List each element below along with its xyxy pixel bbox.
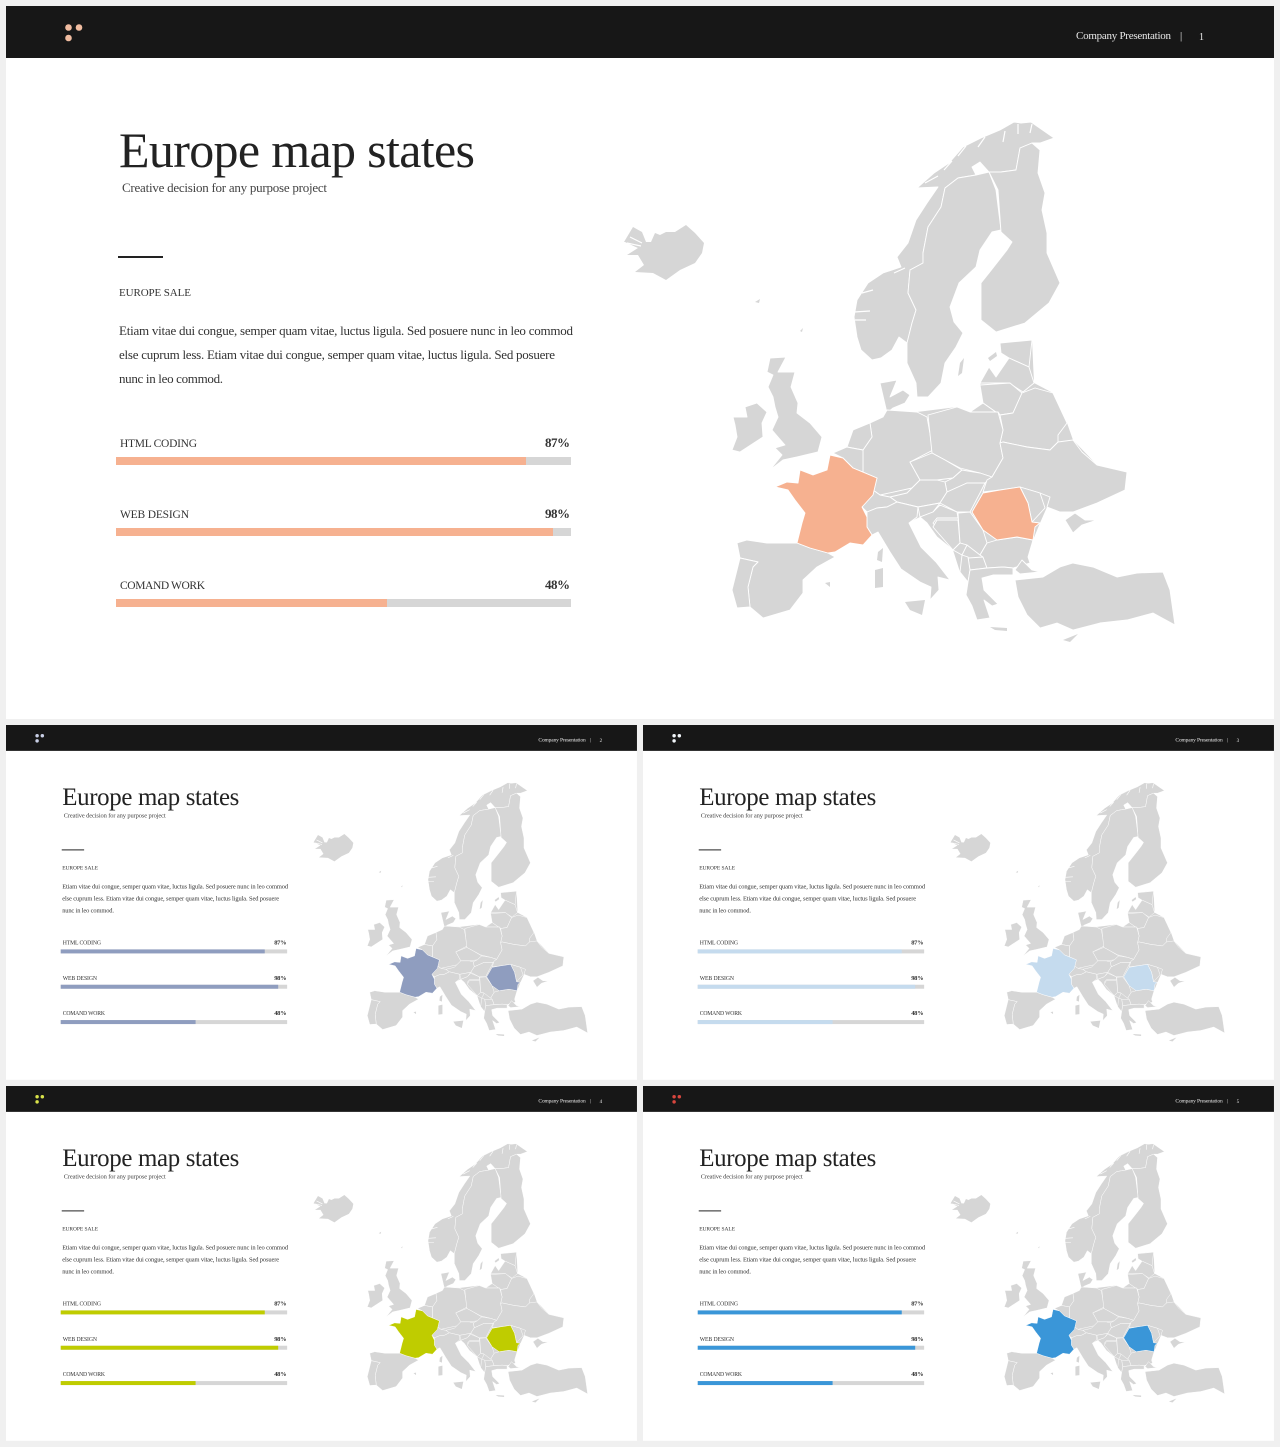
bar: comand work: [698, 1010, 924, 1024]
bar: web design: WEB DESIGN: [700, 976, 734, 982]
panel: slate slide: [6, 725, 637, 1080]
title: Europe map states: [699, 1145, 876, 1172]
bar: html coding: [116, 435, 571, 465]
bar: web design: WEB DESIGN: [63, 976, 97, 982]
bar: html coding: [698, 1300, 924, 1314]
header bar: [643, 1086, 1274, 1112]
body text: else cuprum less. Etiam vitae dui congue, semper quam vitae, luctus ligula. Sed posuere: [62, 1257, 279, 1264]
icon: logo dots: [672, 734, 681, 743]
bar: web design: [61, 1336, 287, 1350]
bar: html coding: 87%: [911, 939, 924, 946]
header divider: |: [1180, 30, 1182, 42]
bar: html coding: HTML CODING: [120, 438, 197, 450]
page number: 1: [1199, 32, 1204, 43]
body text: [699, 1245, 926, 1276]
map of Europe: [951, 783, 1225, 1041]
bar: web design: 98%: [274, 975, 287, 982]
bar: web design: [116, 506, 571, 536]
map of Europe: [624, 122, 1175, 642]
bar: web design: [698, 1336, 924, 1350]
page number: 3: [1237, 739, 1240, 744]
map of Europe: [314, 1144, 588, 1402]
bar: html coding: 87%: [911, 1300, 924, 1307]
divider: [118, 256, 163, 258]
bar: html coding: HTML CODING: [63, 1301, 101, 1307]
body text: [119, 323, 574, 386]
divider: [62, 1209, 84, 1212]
body text: Etiam vitae dui congue, semper quam vitae, luctus ligula. Sed posuere nunc in leo commod: [699, 884, 926, 891]
bar: comand work: [61, 1371, 287, 1385]
body text: Etiam vitae dui congue, semper quam vitae, luctus ligula. Sed posuere nunc in leo commod: [62, 884, 289, 891]
subtitle: Creative decision for any purpose project: [122, 180, 327, 195]
icon: logo dots: [65, 24, 82, 41]
body text: nunc in leo commod.: [62, 908, 114, 915]
body text: nunc in leo commod.: [62, 1269, 114, 1276]
header divider: |: [590, 737, 591, 743]
bar: html coding: 87%: [545, 435, 570, 450]
icon: logo dots: [35, 734, 44, 743]
section heading: EUROPE SALE: [699, 1226, 736, 1232]
header bar: [643, 725, 1274, 751]
header text: Company Presentation: [538, 737, 586, 743]
divider: [62, 848, 84, 851]
header divider: |: [590, 1098, 591, 1104]
bar: web design: WEB DESIGN: [700, 1337, 734, 1343]
header divider: |: [1227, 1098, 1228, 1104]
bar: comand work: [116, 577, 571, 607]
section heading: EUROPE SALE: [62, 1226, 99, 1232]
bar: html coding: HTML CODING: [700, 1301, 738, 1307]
section heading: EUROPE SALE: [699, 865, 736, 871]
bar: comand work: COMAND WORK: [700, 1372, 743, 1378]
bar: comand work: [61, 1010, 287, 1024]
bar: comand work: 48%: [911, 1371, 924, 1378]
bar: html coding: [61, 939, 287, 953]
title: Europe map states: [62, 1145, 239, 1172]
body text: Etiam vitae dui congue, semper quam vitae, luctus ligula. Sed posuere nunc in leo commod: [62, 1245, 289, 1252]
bar: comand work: 48%: [545, 577, 570, 592]
subtitle: Creative decision for any purpose project: [64, 1174, 166, 1181]
body text: nunc in leo commod.: [119, 371, 223, 386]
header bar: [6, 725, 637, 751]
section heading: EUROPE SALE: [62, 865, 99, 871]
bar: web design: 98%: [911, 1336, 924, 1343]
body text: [62, 884, 289, 915]
bar: comand work: 48%: [911, 1010, 924, 1017]
bar: comand work: 48%: [274, 1371, 287, 1378]
title: Europe map states: [119, 122, 475, 178]
bar: web design: [61, 975, 287, 989]
bar: html coding: HTML CODING: [63, 940, 101, 946]
bar: html coding: 87%: [274, 939, 287, 946]
header text: Company Presentation: [538, 1098, 586, 1104]
section heading: EUROPE SALE: [119, 287, 191, 299]
bar: web design: 98%: [911, 975, 924, 982]
bar: html coding: HTML CODING: [700, 940, 738, 946]
bar: web design: [698, 975, 924, 989]
divider: [699, 848, 721, 851]
body text: else cuprum less. Etiam vitae dui congue, semper quam vitae, luctus ligula. Sed posuere: [699, 1257, 916, 1264]
header bar: [6, 1086, 637, 1112]
body text: Etiam vitae dui congue, semper quam vitae, luctus ligula. Sed posuere nunc in leo commod: [119, 323, 574, 338]
bar: comand work: [698, 1371, 924, 1385]
bar: html coding: [698, 939, 924, 953]
icon: logo dots: [672, 1095, 681, 1104]
body text: nunc in leo commod.: [699, 1269, 751, 1276]
page number: 2: [600, 739, 603, 744]
body text: nunc in leo commod.: [699, 908, 751, 915]
bar: web design: 98%: [274, 1336, 287, 1343]
body text: [699, 884, 926, 915]
body text: else cuprum less. Etiam vitae dui congue, semper quam vitae, luctus ligula. Sed posuere: [119, 347, 555, 362]
panel: blue slide: [643, 1086, 1274, 1441]
bar: comand work: COMAND WORK: [63, 1372, 106, 1378]
subtitle: Creative decision for any purpose project: [701, 1174, 803, 1181]
subtitle: Creative decision for any purpose project: [64, 813, 166, 820]
page number: 4: [600, 1100, 603, 1105]
divider: [699, 1209, 721, 1212]
map of Europe: [951, 1144, 1225, 1402]
panel: light blue slide: [643, 725, 1274, 1080]
body text: else cuprum less. Etiam vitae dui congue, semper quam vitae, luctus ligula. Sed posuere: [699, 896, 916, 903]
body text: [62, 1245, 289, 1276]
header text: Company Presentation: [1076, 30, 1172, 42]
page number: 5: [1237, 1100, 1240, 1105]
bar: comand work: COMAND WORK: [63, 1011, 106, 1017]
body text: else cuprum less. Etiam vitae dui congue, semper quam vitae, luctus ligula. Sed posuere: [62, 896, 279, 903]
bar: web design: 98%: [545, 506, 570, 521]
bar: comand work: COMAND WORK: [700, 1011, 743, 1017]
panel: lime slide: [6, 1086, 637, 1441]
header divider: |: [1227, 737, 1228, 743]
bar: html coding: [61, 1300, 287, 1314]
subtitle: Creative decision for any purpose project: [701, 813, 803, 820]
header bar: [6, 6, 1274, 58]
bar: html coding: 87%: [274, 1300, 287, 1307]
bar: comand work: COMAND WORK: [120, 580, 206, 592]
bar: web design: WEB DESIGN: [120, 509, 190, 521]
title: Europe map states: [699, 784, 876, 811]
bar: web design: WEB DESIGN: [63, 1337, 97, 1343]
map of Europe: [314, 783, 588, 1041]
header text: Company Presentation: [1175, 737, 1223, 743]
body text: Etiam vitae dui congue, semper quam vitae, luctus ligula. Sed posuere nunc in leo commod: [699, 1245, 926, 1252]
bar: comand work: 48%: [274, 1010, 287, 1017]
icon: logo dots: [35, 1095, 44, 1104]
panel: main slide (peach): [6, 6, 1274, 719]
header text: Company Presentation: [1175, 1098, 1223, 1104]
title: Europe map states: [62, 784, 239, 811]
